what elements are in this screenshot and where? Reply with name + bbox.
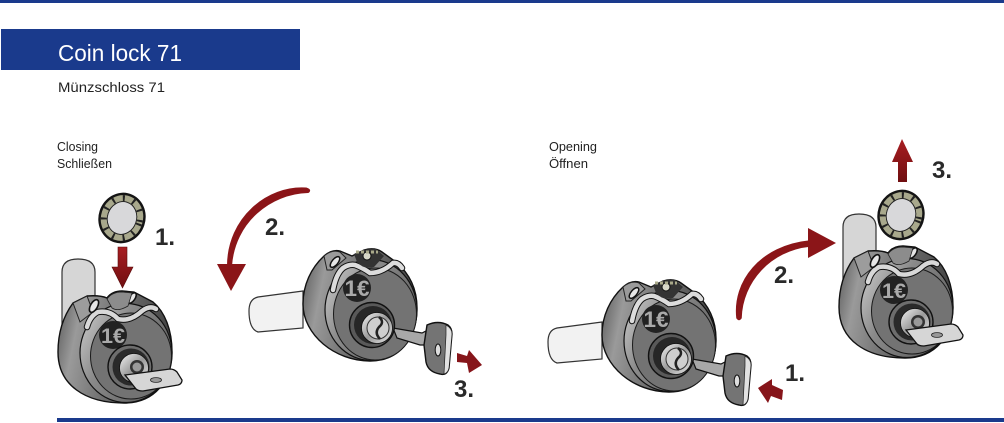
arrow: coin inserted downward: [112, 247, 133, 288]
arrow: curved turn to the right: [737, 228, 836, 320]
opening heading: Öffnen: [549, 157, 588, 171]
closing heading: Closing: [57, 140, 98, 154]
step number 2: 2.: [265, 214, 285, 241]
closing heading: [57, 140, 112, 171]
arrow: coin ejected upward: [892, 139, 913, 182]
panel: closing steps 2 and 3: [217, 188, 482, 403]
step number 1: 1.: [785, 360, 805, 387]
title banner: [1, 29, 300, 70]
lock with key horizontal: 1€: [882, 280, 906, 303]
lock with key horizontal: 1€: [101, 325, 125, 348]
lock with key inserted: [548, 280, 751, 405]
step number 2: 2.: [774, 262, 794, 289]
bottom blue rule: [57, 418, 1004, 422]
subtitle: Münzschloss 71: [58, 79, 165, 95]
lock with key turned vertical: 1€: [344, 276, 370, 301]
lock with key inserted: 1€: [644, 307, 668, 332]
icon: ejected coin: [871, 183, 931, 247]
panel: opening step 3: [839, 139, 963, 358]
top blue rule: [0, 0, 1004, 3]
arrow: curved turn to the left: [217, 188, 309, 291]
arrow: key removed: [457, 350, 482, 373]
panel: opening steps 1 and 2: [548, 228, 836, 405]
opening heading: Opening: [549, 140, 597, 154]
lock with key horizontal: [58, 259, 182, 403]
step number 3: 3.: [932, 157, 952, 184]
title banner: Coin lock 71: [58, 40, 182, 66]
panel: closing step 1: [58, 186, 182, 403]
icon: coin above lock: [92, 186, 152, 250]
arrow: key pushed in: [758, 379, 783, 403]
lock with key horizontal: [839, 214, 963, 358]
opening heading: [549, 140, 597, 171]
step number 3: 3.: [454, 376, 474, 403]
lock with key turned vertical: [249, 249, 452, 374]
closing heading: Schließen: [57, 157, 112, 171]
step number 1: 1.: [155, 224, 175, 251]
